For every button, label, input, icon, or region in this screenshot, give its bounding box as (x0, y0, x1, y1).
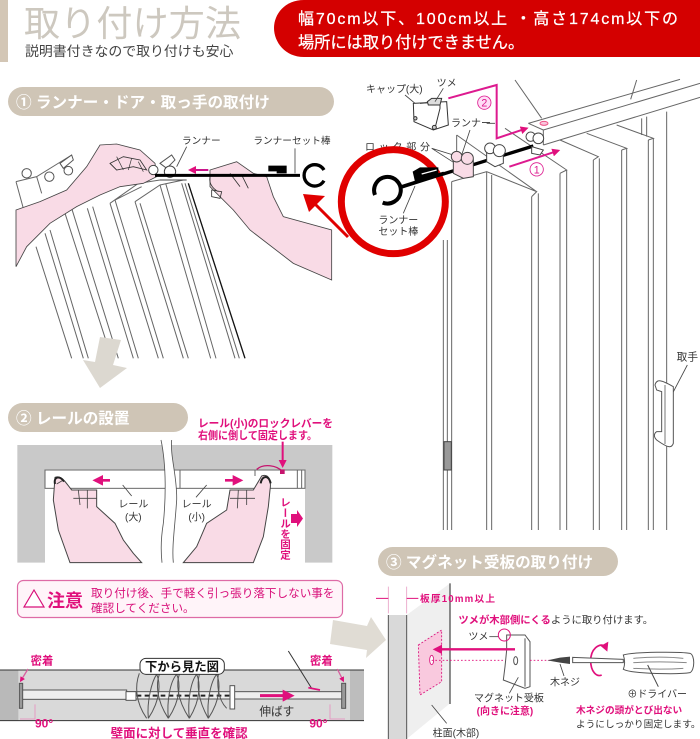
latch (444, 442, 451, 470)
heading: step 2: ② レールの設置 (16, 410, 130, 428)
lock lever (257, 466, 283, 472)
handle (654, 381, 673, 447)
icon: warning (24, 590, 44, 607)
arrow: large down (83, 337, 127, 388)
pink arrow 1 (509, 151, 558, 167)
label: handle: 取手 (677, 351, 698, 364)
subtitle: 説明書付きなので取り付けも安心 (25, 43, 233, 59)
label: tight left: 密着 (31, 653, 53, 667)
callout: installation limits: 場所には取り付けできません。 (298, 34, 524, 52)
arrow: left rail (95, 476, 110, 484)
header: title block (0, 0, 241, 62)
illustration: view from below (0, 651, 364, 739)
heading: step 3 (378, 547, 618, 576)
callout circle: magnified rod: セット棒 (378, 225, 418, 238)
label: claw: ツメ (468, 632, 488, 643)
label: extend: 伸ばす (259, 706, 294, 719)
door panels (16, 155, 239, 358)
callout: caution: 確認してください。 (91, 601, 195, 615)
right angle right (309, 704, 345, 731)
label: post face (432, 705, 479, 739)
rotation arrow (591, 642, 608, 676)
label: driver: ⊕ドライバー (627, 688, 687, 700)
illustration: magnet plate mounting (376, 583, 700, 739)
label: claw (468, 632, 498, 643)
dashed plate (418, 630, 442, 695)
label: small rail: レール (182, 499, 212, 510)
label: tight left (21, 653, 53, 681)
illustration: door overview (365, 79, 700, 530)
right angle right: 90° (309, 717, 328, 731)
step mark 1: 1 (534, 164, 540, 176)
heading: step 2 (8, 403, 188, 432)
pink arrow 2 (448, 85, 527, 138)
label: runner: ランナー (182, 136, 221, 147)
post (407, 583, 450, 739)
note: lock lever: 右側に倒して固定します。 (198, 428, 317, 442)
note: lock lever (198, 417, 333, 442)
step mark 2: 2 (481, 98, 487, 110)
arrow: extend (260, 691, 292, 700)
arrow: to post (435, 646, 515, 653)
note: fix rail vertical (279, 497, 303, 561)
label: lock part: ロック部分 (365, 142, 430, 154)
right hand (183, 475, 270, 563)
label: wood screw: 木ネジ (550, 677, 580, 689)
label: magnet plate: マグネット受板 (474, 692, 544, 705)
label: wood screw (550, 664, 580, 689)
magnified rod (374, 167, 444, 204)
label: small rail: (小) (188, 512, 205, 524)
screw (547, 657, 570, 664)
caution text: 取り付け後、手で軽く引っ張り落下しない事を (91, 586, 334, 600)
label: runner: ランナー (451, 118, 491, 130)
rod and runners (440, 146, 533, 175)
callout: installation limits: 幅70cm以下、100cm以上 ・高さ174cm以下の (298, 10, 678, 28)
callout: caution (18, 580, 342, 618)
arrow: right rail (225, 476, 241, 484)
right arm (210, 162, 332, 280)
claw circle (498, 629, 510, 641)
label: large rail: (大) (125, 511, 142, 524)
left arm (16, 144, 157, 267)
rail (515, 79, 700, 145)
label: tight right (310, 653, 343, 681)
illustration: rail placement (17, 440, 332, 567)
note: lock lever: レール(小)のロックレバーを (198, 417, 333, 430)
spiral door folds (137, 673, 227, 718)
label: cap: キャップ(大) (366, 82, 423, 95)
pointer (288, 651, 312, 688)
title: 取り付け方法 (24, 3, 241, 44)
runners on folded door (22, 155, 175, 181)
note: screw head (576, 704, 700, 730)
callout: installation limits (274, 0, 700, 57)
thickness dimension (376, 587, 495, 613)
heading: step 1 (8, 87, 334, 116)
label: magnet plate: (向きに注意) (477, 704, 533, 717)
illustration: attaching runners by hand (16, 135, 332, 358)
label: large rail: レール (118, 499, 148, 510)
rail (45, 470, 305, 488)
note: claw orientation: ツメが木部側にくるように取り付けます。 (458, 613, 653, 626)
label: view from below: 下から見た図 (145, 660, 219, 674)
screwdriver (573, 652, 694, 687)
label: runner set rod: ランナーセット棒 (253, 135, 331, 147)
step mark 2 (478, 96, 491, 110)
illustration: door handle and latch (444, 351, 698, 470)
heading: step 3: ③ マグネット受板の取り付け (386, 552, 593, 572)
right angle left (20, 704, 53, 731)
label: claw: ツメ (437, 79, 457, 90)
arrow: large right (330, 617, 386, 658)
label: tight right: 密着 (310, 653, 333, 667)
runner set rod (155, 148, 324, 186)
wall band (0, 670, 364, 721)
step mark 1 (530, 163, 543, 176)
break band (161, 440, 177, 567)
note: fix rail vertical: レールを固定 (279, 497, 291, 561)
left hand (53, 477, 142, 563)
caution word: 注意 (47, 591, 83, 611)
heading: step 1: ① ランナー・ドア・取っ手の取付け (16, 92, 270, 112)
label: rod: ランナー (378, 214, 418, 226)
note: screw head: ようにしっかり固定します。 (576, 719, 700, 730)
dotted axis (432, 659, 550, 662)
arrow: lever pointer (280, 442, 286, 466)
door panels (443, 112, 667, 530)
label: small rail (182, 485, 212, 524)
note: screw head: 木ネジの頭がとび出ない (576, 704, 683, 716)
wall frame (17, 445, 332, 563)
right angle left: 90° (35, 717, 53, 731)
cap (413, 98, 448, 130)
magnet plate (503, 635, 530, 688)
rail from below (19, 683, 346, 709)
thickness dimension: 板厚10mm以上 (420, 593, 495, 605)
arrow: slide direction (190, 167, 208, 173)
arrow: red pointer to rod (303, 194, 348, 237)
callout circle: magnified rod (341, 150, 445, 254)
label: large rail (118, 485, 148, 524)
label: magnet plate (474, 677, 544, 717)
runner pair at rod tip (149, 165, 187, 180)
